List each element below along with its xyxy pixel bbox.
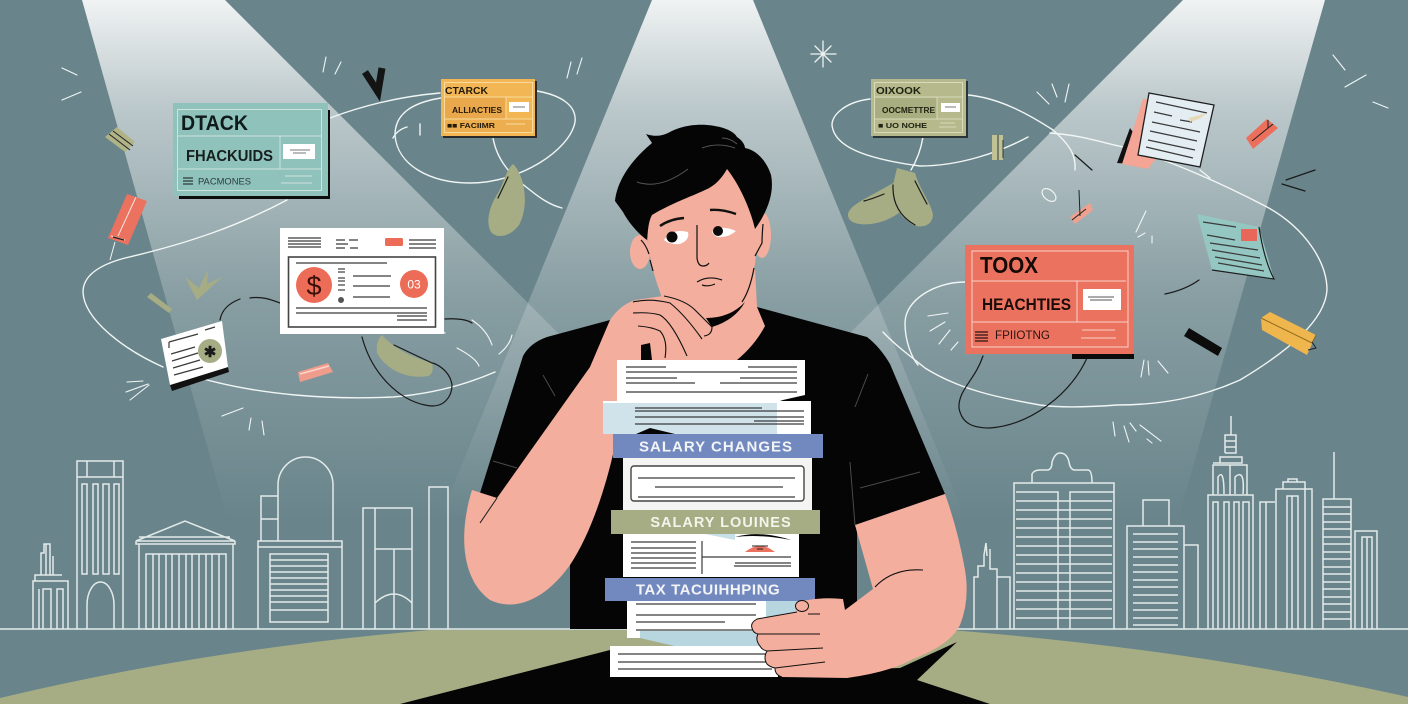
neck <box>660 269 765 360</box>
scattered tags <box>105 119 1316 382</box>
sheet 2 <box>603 401 811 434</box>
black curve lines <box>220 155 1315 428</box>
face <box>648 155 758 320</box>
person <box>464 125 945 629</box>
ground line <box>0 628 1408 630</box>
icon: red badge <box>400 270 428 298</box>
sheet 4 <box>623 534 799 577</box>
table <box>0 630 1408 704</box>
icon: dollar coin: $ <box>306 271 322 301</box>
card: red stack card <box>965 245 1134 359</box>
sheet 5 <box>627 601 800 655</box>
olive leaves <box>147 164 933 377</box>
small tick marks <box>62 55 1388 443</box>
leaf outlines <box>394 177 927 363</box>
tag: pink <box>298 363 333 382</box>
icon: black check mark <box>365 68 382 92</box>
card: olive stack card: ■ UO NOHE <box>878 121 927 130</box>
card: orange stack card <box>441 79 537 138</box>
tag: olive clip <box>992 135 1003 160</box>
shirt <box>480 300 945 629</box>
right city skyline <box>974 416 1377 629</box>
tag: olive <box>105 127 135 152</box>
card: orange stack card: ALLIACTIES <box>452 106 503 115</box>
ears <box>630 212 771 269</box>
left city skyline <box>33 457 448 629</box>
tag: red right <box>1246 119 1278 149</box>
sheet 1 <box>617 360 805 402</box>
hair <box>615 125 772 240</box>
card: red stack card: TOOX <box>980 252 1039 278</box>
card: teal stack card: PACMONES <box>198 176 251 188</box>
bar: black <box>1184 328 1222 356</box>
document: id card <box>161 321 229 391</box>
jaw and ear lines <box>641 224 763 302</box>
sheet 3 <box>623 458 812 510</box>
band: tax tacuihhping <box>605 578 815 601</box>
left arm <box>464 320 660 605</box>
card: olive stack card: OOCMETTRE <box>882 106 936 115</box>
document: id card: ✱ <box>204 344 217 361</box>
band: salary changes <box>613 434 823 458</box>
card: orange stack card: ■■ FACIIMR <box>447 121 496 130</box>
band: salary louines <box>611 510 820 534</box>
black shadow at table front <box>400 642 990 704</box>
tag: red left <box>108 194 147 260</box>
icon: small oval <box>1040 186 1058 204</box>
icon: sparkle star <box>811 41 836 67</box>
right arm and hand <box>752 494 967 678</box>
hand on chin <box>610 296 712 360</box>
orbit lines <box>83 91 1327 407</box>
sheet 6 <box>610 646 778 677</box>
card: teal stack card: FHACKUIDS <box>186 148 273 165</box>
eyes and brows <box>664 231 688 244</box>
icon: red badge: 03 <box>407 278 421 292</box>
card: red stack card: FPIIOTNG <box>995 330 1050 342</box>
card: teal stack card: DTACK <box>181 112 248 135</box>
block: yellow <box>1261 312 1316 355</box>
tag: small pink <box>1070 190 1093 224</box>
paper stack <box>603 360 823 677</box>
chin shadow <box>706 302 745 327</box>
band: salary louines: SALARY LOUINES <box>650 515 792 531</box>
document: pay cheque <box>280 228 444 334</box>
card: olive stack card <box>871 79 968 138</box>
icon: dollar coin <box>296 267 332 303</box>
card: olive stack card: OIXOOK <box>876 85 921 97</box>
band: salary changes: SALARY CHANGES <box>639 438 793 456</box>
card: orange stack card: CTARCK <box>445 85 488 97</box>
spotlight beams <box>82 0 1325 535</box>
document: pink-backed sheet <box>1117 93 1214 169</box>
band: tax tacuihhping: TAX TACUIHHPING <box>636 582 780 598</box>
card: teal stack card <box>173 103 330 199</box>
head <box>615 125 772 327</box>
document: teal note <box>1197 214 1274 279</box>
card: red stack card: HEACHTIES <box>982 296 1071 314</box>
